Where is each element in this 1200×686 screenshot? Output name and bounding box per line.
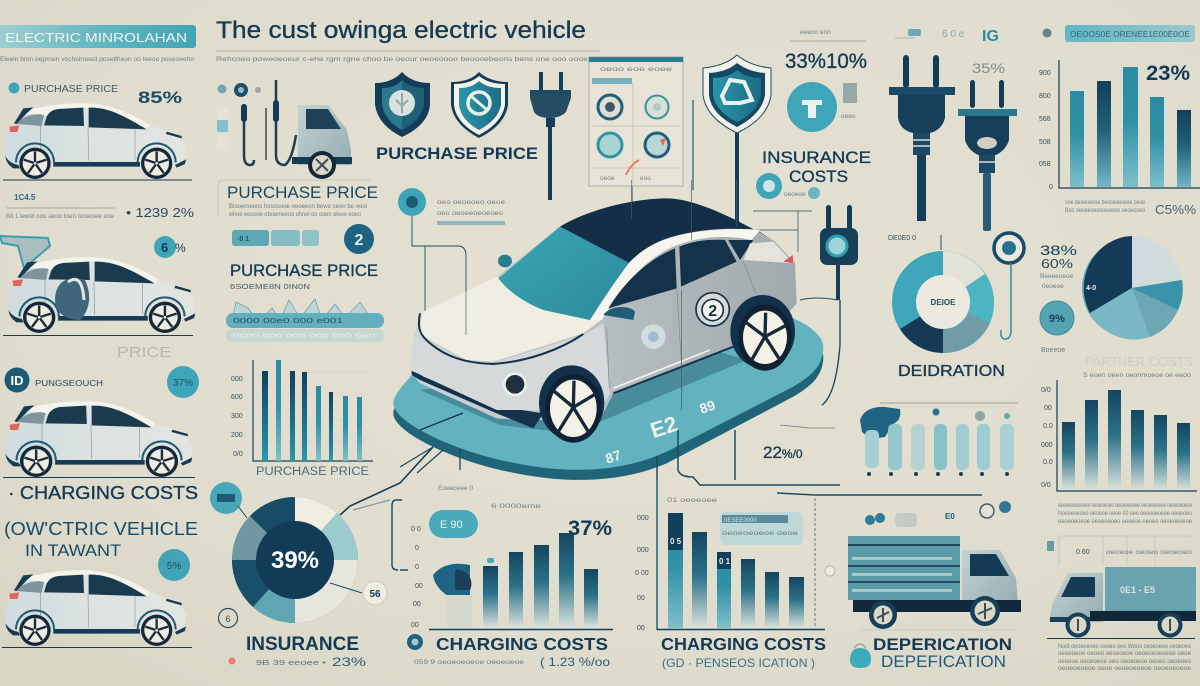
heading: purchase price centre: PURCHASE PRICE bbox=[376, 145, 538, 163]
car body bbox=[410, 198, 797, 443]
icon: percent badge bbox=[167, 366, 199, 398]
panel: car 2 with open trunk bbox=[0, 236, 195, 336]
chart: top right bars: 058 bbox=[1039, 161, 1051, 168]
band 2: 0000 000 000 000 000 0o0 bbox=[233, 334, 376, 340]
chart: top right bars: 0 bbox=[1049, 184, 1053, 191]
chart: donut: DE0E0 0 bbox=[888, 235, 916, 242]
stat: 38% 60%: 0eoeoe bbox=[1042, 283, 1064, 290]
chart: purchase price bars bbox=[231, 360, 373, 478]
area sparkline bbox=[232, 299, 372, 322]
car 1 bbox=[5, 103, 186, 179]
chart: donut bbox=[888, 235, 994, 353]
port bbox=[641, 324, 666, 349]
axis labels: 0/0 bbox=[1041, 387, 1051, 394]
value: 39% bbox=[271, 547, 319, 574]
percent: 85% bbox=[138, 88, 182, 107]
platform bbox=[393, 309, 823, 480]
chart: 39% donut: 56 bbox=[369, 589, 381, 600]
mirrors bbox=[603, 307, 635, 320]
stat: 22%: 22%/0 bbox=[763, 443, 803, 462]
panel: purchase price 1: -0 1 bbox=[237, 236, 249, 243]
stat row 1 bbox=[6, 193, 195, 220]
icon: teal percent badge: 9% bbox=[1049, 313, 1065, 325]
chart: pie bbox=[1082, 236, 1183, 340]
bars bbox=[668, 513, 683, 628]
heading: PURCHASE PRICE bbox=[230, 261, 378, 280]
panel: truck 2: oeoeoe oeoeoeoe oeo oeoeoeoe oeoeo oeoeoeo bbox=[1058, 658, 1191, 665]
panel: car 2 with open trunk: 6 bbox=[161, 240, 168, 255]
icons above truck: E0 bbox=[945, 512, 955, 521]
bar labels: 0 5 bbox=[670, 537, 682, 546]
platform text: 87 bbox=[603, 447, 623, 467]
faded percent: 35% bbox=[972, 60, 1005, 76]
axis labels: 900 bbox=[1039, 70, 1051, 77]
chart: right bars bbox=[1041, 347, 1197, 525]
chart: charging costs bars 1: 00 bbox=[415, 583, 423, 590]
heading: insurance costs: INSURANCE bbox=[762, 148, 871, 167]
icon: teal circle with text bbox=[787, 82, 857, 132]
icon: dark ring: ID bbox=[10, 373, 24, 388]
chart: purchase price bars: 200 bbox=[231, 432, 243, 439]
panel: truck 2: oeoeoe oeoeo oeoeoeo bbox=[1106, 549, 1192, 556]
cab bbox=[1049, 573, 1103, 622]
stat: 33% 10%: 33%10% bbox=[785, 50, 867, 73]
chart: right bars: Boeeoe bbox=[1041, 347, 1065, 354]
chart: top right bars: 508 bbox=[1039, 139, 1051, 146]
icon: teal ring and dot bbox=[756, 173, 820, 199]
chart: charging costs bars 2: 0 1 bbox=[719, 557, 731, 566]
stat row 1: 1C4.5 bbox=[14, 193, 36, 202]
faded heading: PARTNER COSTS bbox=[1085, 354, 1193, 369]
callout: left of car bbox=[398, 188, 505, 225]
chart: top right bars bbox=[1039, 60, 1200, 217]
car 4 bbox=[5, 570, 186, 646]
chart: charging costs bars 2: 01 oeoeoee bbox=[667, 497, 718, 504]
heading: charging costs 1: CHARGING COSTS bbox=[436, 634, 608, 654]
panel: charger and truck illustration bbox=[217, 80, 352, 179]
callout: left of car: oeo oeoeeoeoeoeo bbox=[437, 210, 503, 217]
header tag label: ELECTRIC MINROLAHAN bbox=[5, 30, 187, 45]
chart: charging costs bars 2: 00 bbox=[637, 625, 645, 632]
icon: percent pin bbox=[158, 549, 190, 581]
insurance caption: 23% bbox=[332, 655, 366, 669]
icon: percent pin: 5% bbox=[167, 561, 181, 572]
stat: 38% 60%: 38% bbox=[1040, 242, 1077, 258]
car 2 bbox=[8, 257, 195, 333]
chart: right bars: 0.0 bbox=[1043, 459, 1053, 466]
chart: charging costs bars 1 bbox=[411, 485, 613, 630]
panel: dashboard card bbox=[589, 57, 683, 186]
heading: deperication: DEPEFICATION bbox=[881, 653, 1006, 671]
columns bbox=[865, 430, 879, 468]
icon: percent badge bbox=[154, 236, 176, 258]
caption: ooe beoeoenoe beoseoeoeoe oeoe bbox=[1065, 199, 1145, 206]
chart: top right bars: 568 bbox=[1039, 116, 1051, 123]
icon: large shield bbox=[703, 55, 771, 133]
chart: charging costs bars 2: 000 bbox=[637, 547, 649, 554]
icon row top bbox=[895, 28, 999, 45]
insurance caption bbox=[228, 655, 366, 669]
icon: teal shield bbox=[451, 72, 508, 138]
panel: truck 2 bbox=[1047, 536, 1196, 672]
chart: pie: 4-0 bbox=[1086, 285, 1096, 292]
leader lines bbox=[466, 180, 737, 410]
icon: teal bag bbox=[850, 644, 871, 668]
headlight bbox=[503, 372, 527, 396]
icon: small teal badge bbox=[8, 82, 20, 94]
wheel rear bbox=[730, 295, 795, 371]
panel: purchase price 1: whoe eeoooe oboemeeoo ohnel oo ooen oleoo eoeo bbox=[228, 211, 361, 218]
header subtext left: Eleein bnm oeprnen vochoirneed poseitheon oo teeoo poseoeehn bbox=[0, 56, 194, 63]
panel: header tag right bbox=[1042, 25, 1195, 42]
icon row top: 6 0 e bbox=[942, 29, 965, 40]
red tick bbox=[626, 160, 639, 175]
badge bbox=[344, 224, 374, 254]
panel: header tag left bbox=[0, 25, 196, 48]
charging cables bbox=[244, 80, 296, 165]
callout bbox=[330, 583, 362, 593]
faded price label: PRICE bbox=[117, 344, 171, 361]
heading: charging costs 1: ( 1.23 %/oo bbox=[540, 655, 610, 669]
heading: owning vehicle in Taiwan bbox=[4, 519, 198, 560]
cargo bbox=[848, 536, 960, 600]
card footer: oeoe bbox=[600, 175, 615, 182]
panel: purchase price 2 bbox=[226, 261, 384, 342]
band 2 bbox=[226, 329, 384, 342]
bars bbox=[483, 566, 498, 628]
platform text: E2 bbox=[647, 411, 680, 443]
axis labels: 0 0 bbox=[411, 526, 421, 533]
top small text and rule: eeeoo enn bbox=[800, 29, 831, 36]
teal bubble bbox=[429, 510, 478, 538]
chart: vial columns bbox=[860, 403, 1018, 476]
callout: left of car: oeo oeoeoeo oeoe bbox=[437, 199, 505, 206]
chassis bbox=[853, 600, 1021, 612]
chart: charging costs bars 2: 0 00 bbox=[635, 570, 649, 577]
heading: owning vehicle in Taiwan: IN TAWANT bbox=[25, 541, 121, 560]
chassis bbox=[1090, 611, 1196, 621]
legend box bbox=[720, 512, 803, 545]
chart: charging costs bars 1: E 90 bbox=[440, 519, 463, 531]
panel: car 4 row bbox=[2, 549, 192, 648]
title rule and subtitle: Rehcneo poweoeoeur c-ehe rgm rgne choo be oeour oeoeoooo beoooebeons bens one ooo oooe bbox=[216, 56, 588, 63]
band 1: 0000 00e0 000 e001 bbox=[233, 318, 343, 325]
legend box: 0ESEE0000 bbox=[724, 518, 757, 524]
truck 1 bbox=[848, 536, 1021, 629]
icon: teal percent badge bbox=[1040, 301, 1074, 335]
car 3 bbox=[5, 401, 192, 477]
heading: deperication: DEPERICATION bbox=[873, 635, 1012, 654]
heading: deperication bbox=[862, 630, 1018, 671]
heading: charging costs 1 bbox=[407, 634, 610, 669]
icon: ring with pin line bbox=[994, 233, 1024, 339]
pills bbox=[232, 230, 269, 246]
marker bbox=[825, 566, 835, 576]
badge: 2 bbox=[355, 232, 364, 249]
chart: right bars: 0/0 bbox=[1041, 482, 1051, 489]
door seams bbox=[607, 262, 756, 393]
band 1 bbox=[226, 313, 384, 328]
dark blob bbox=[860, 407, 900, 438]
value: 23% bbox=[1146, 62, 1190, 85]
icon: dark ring bbox=[4, 368, 30, 392]
wheels bbox=[1066, 612, 1090, 638]
dial 2 bbox=[646, 96, 668, 118]
insurance caption: 9B 39 eeoee • bbox=[256, 660, 327, 667]
icon: percent badge: 37% bbox=[173, 378, 193, 389]
chart: charging costs bars 1: 0 bbox=[415, 564, 419, 571]
bars bbox=[1062, 422, 1075, 490]
small icons bbox=[218, 84, 226, 94]
body text: Blooemeoos hososooe oeoeeon bewo seon be oeoi bbox=[229, 203, 367, 210]
heading: insurance: INSURANCE bbox=[246, 634, 359, 655]
heading: insurance costs: COSTS bbox=[789, 167, 848, 186]
wheel front bbox=[539, 365, 604, 443]
chart: charging costs bars 1: 0 bbox=[415, 545, 419, 552]
label: PUNGSEOUCH bbox=[35, 379, 103, 388]
connectors over platform bbox=[400, 413, 840, 485]
axis labels: 000 bbox=[231, 376, 243, 383]
chart: charging costs bars 2 bbox=[635, 497, 835, 632]
stat row 1: Bit 1 lewel oou aeoo toen oooeoee ooe bbox=[6, 213, 114, 220]
chart: right bars: 0.0 bbox=[1043, 423, 1053, 430]
stat row 1: • 1239 2% bbox=[126, 205, 195, 220]
icon: dark shield bbox=[375, 72, 430, 137]
chart: top right bars: C5%% bbox=[1155, 202, 1196, 217]
top caption: Eoeeoeee 0 bbox=[438, 485, 473, 492]
side windows bbox=[608, 248, 677, 308]
icons above truck bbox=[865, 501, 1011, 527]
donut label: DEIOE bbox=[931, 298, 956, 307]
icon: small plug right of car bbox=[820, 205, 858, 300]
heading: PURCHASE PRICE bbox=[227, 183, 378, 202]
main car on platform bbox=[393, 180, 823, 480]
cab bbox=[962, 550, 1018, 605]
icon: teal circle with text: oeeo bbox=[841, 113, 856, 120]
chart: 39% donut bbox=[210, 482, 387, 628]
panel: car 3 row bbox=[3, 366, 199, 478]
heading: deioration: DEIDRATION bbox=[898, 363, 1005, 380]
stat: 38% 60% bbox=[1040, 242, 1077, 290]
value: 37% bbox=[568, 517, 612, 540]
heading: charging costs 2 bbox=[661, 634, 826, 670]
dial 3 bbox=[598, 133, 622, 157]
chart: charging costs bars 1: 00 bbox=[413, 601, 421, 608]
cargo bbox=[1105, 567, 1196, 611]
stat: 38% 60%: Beeeeoeoe bbox=[1040, 273, 1074, 280]
icon: second plug bbox=[958, 80, 1017, 231]
open trunk bbox=[0, 236, 50, 268]
title: The cust owinga electric vehicle bbox=[216, 17, 586, 44]
icon: large plug bbox=[889, 55, 955, 221]
icon: plug centre bbox=[530, 72, 571, 127]
heading: charging costs left: · CHARGING COSTS bbox=[8, 483, 198, 503]
chart: charging costs bars 1: 00 bbox=[411, 622, 419, 629]
panel: truck 2: 0E1 - E5 bbox=[1120, 585, 1155, 595]
chart: purchase price bars: 0/0 bbox=[233, 451, 243, 458]
car body: 2 bbox=[708, 303, 717, 320]
chart: charging costs bars 1: 6 0000eme bbox=[491, 503, 542, 510]
bars bbox=[1070, 91, 1084, 187]
chart: right bars: 00 bbox=[1044, 405, 1052, 412]
chart: right bars: 000 bbox=[1041, 442, 1053, 449]
icon row top: IG bbox=[982, 28, 999, 45]
badge bbox=[696, 293, 729, 326]
axis labels: 000 bbox=[637, 515, 649, 522]
chart: purchase price bars: 600 bbox=[231, 394, 243, 401]
panel: dashboard card: eoo bbox=[640, 175, 651, 182]
legend box: oeoeoeoeoe oeoe bbox=[722, 530, 799, 537]
caption: 6SOEME8N 0IN0N bbox=[230, 284, 310, 291]
icon: charger blob bbox=[433, 564, 470, 620]
panel: truck 2: oeoeoeoe oeoeo oeoeoeoe oeoeoeoeoeoe oeoe bbox=[1058, 650, 1191, 657]
card header text: oeoo eoe eoee bbox=[600, 66, 673, 73]
chart: 39% donut: 6 bbox=[225, 614, 231, 624]
roof rail bbox=[590, 229, 760, 320]
icon: teal ring and dot: oeoeoe bbox=[784, 191, 806, 198]
top small text and rule bbox=[790, 29, 866, 41]
swirl icon bbox=[55, 278, 89, 320]
panel: truck 2: 0 60 bbox=[1076, 549, 1090, 556]
panel: car 2 with open trunk: % bbox=[175, 241, 186, 255]
bars bbox=[262, 371, 268, 461]
side cards bbox=[217, 108, 228, 120]
connector lines bbox=[340, 100, 982, 630]
roof bbox=[560, 198, 775, 263]
heading: owning vehicle in Taiwan: (OW'CTRIC VEHICLE bbox=[4, 519, 198, 539]
dial 1 bbox=[598, 95, 622, 119]
icon: teal badge bbox=[210, 482, 242, 514]
panel: truck 2: oeoeoeoeoe oeoe oeoeoeoeoe oeoeoeoeoe bbox=[1058, 665, 1191, 672]
dots bbox=[867, 472, 1009, 476]
chart: charging costs bars 2: 00 bbox=[637, 595, 645, 602]
heading: insurance costs bbox=[762, 148, 871, 186]
heading: charging costs 1: 059 9 oeoeoeoeoe oeoeoeoe bbox=[414, 659, 524, 666]
heading: charging costs 2: CHARGING COSTS bbox=[661, 634, 826, 654]
heading: charging costs 2: (GD · PENSEOS ICATION ) bbox=[662, 656, 815, 670]
frame and header bbox=[1059, 536, 1195, 565]
chart: purchase price bars: 300 bbox=[231, 413, 243, 420]
panel: header tag right: OEOOS0E ORENEE1E00E0OE bbox=[1070, 30, 1190, 39]
icon: ring bbox=[218, 608, 238, 628]
chart: right bars: S eoen oeen oeonmoeoe oe eeoo bbox=[1083, 372, 1191, 379]
platform text bbox=[598, 397, 723, 467]
label: PURCHASE PRICE bbox=[24, 84, 118, 95]
panel: purchase price row with car 1 bbox=[3, 82, 192, 180]
panel: purchase price 1 bbox=[218, 180, 378, 254]
stat: 38% 60%: 60% bbox=[1041, 256, 1074, 271]
wheels bbox=[869, 601, 897, 629]
windshield bbox=[498, 227, 630, 320]
chart: top right bars: Boo oeoeeoeoooeoeoo oeoeooeo bbox=[1065, 207, 1145, 214]
chart caption: PURCHASE PRICE bbox=[256, 466, 369, 478]
truck bbox=[298, 105, 351, 165]
dial 4 bbox=[645, 133, 669, 157]
platform text: 89 bbox=[697, 397, 717, 417]
chart: top right bars: 800 bbox=[1039, 93, 1051, 100]
